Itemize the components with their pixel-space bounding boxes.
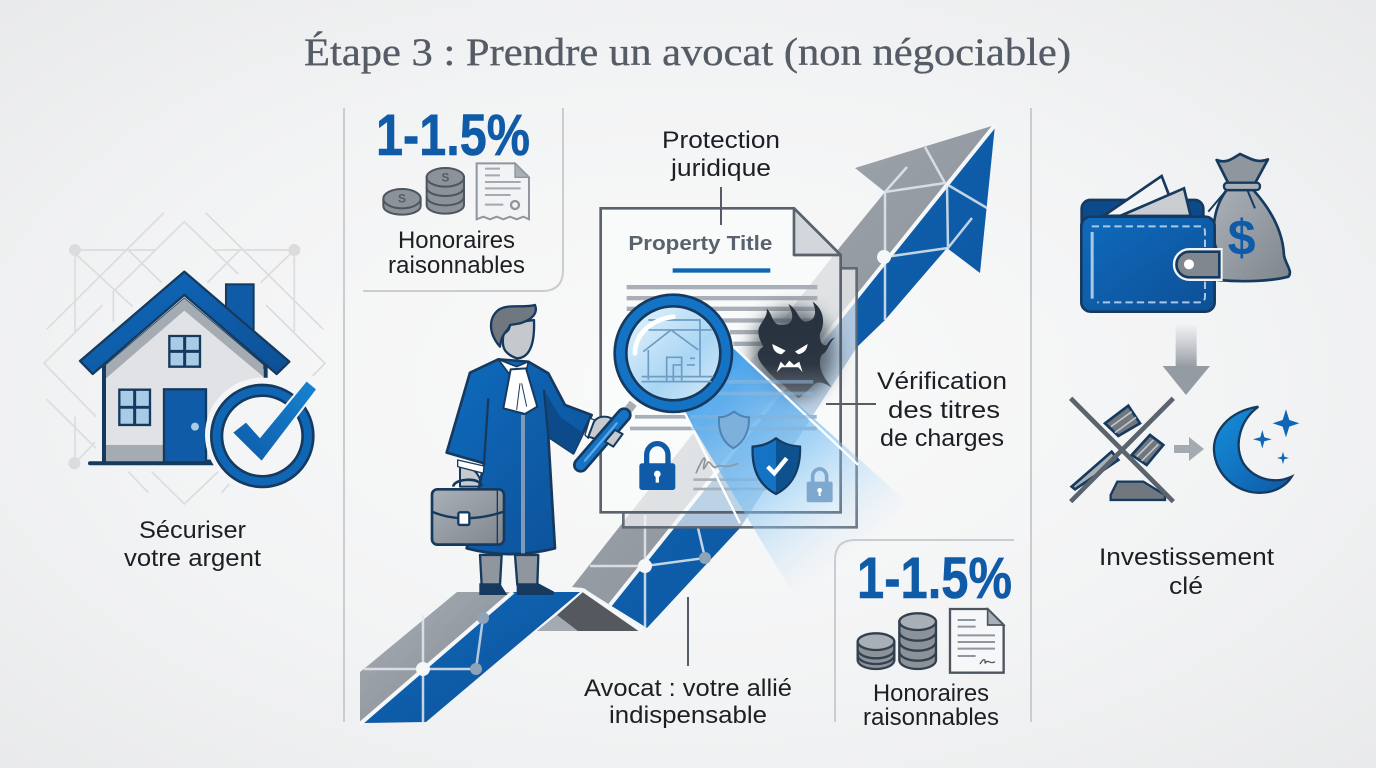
document title: Property Title (628, 232, 772, 255)
document: property title (601, 208, 923, 600)
callout: avocat allié: indispensable (609, 702, 767, 729)
callout: vérification des titres (826, 368, 1007, 452)
callout: vérification des titres: Vérification (877, 368, 1007, 395)
callout: protection juridique: juridique (670, 155, 771, 182)
icon: house with check mark (44, 213, 325, 504)
panel: honoraires haut (376, 103, 530, 279)
callout: protection juridique: Protection (662, 127, 780, 154)
callout: avocat allié (584, 597, 792, 729)
label: sécuriser votre argent: votre argent (124, 545, 261, 572)
icon: faded padlock (807, 469, 833, 502)
icon: moon and stars (1214, 407, 1299, 493)
icon: coins and receipt (383, 163, 529, 219)
label: investissement clé (1099, 544, 1274, 600)
label: investissement clé: Investissement (1099, 544, 1274, 571)
icon: threat demon (752, 302, 835, 398)
icon: magnifying glass lens (613, 293, 733, 413)
icon: small shield (719, 412, 749, 448)
panel: honoraires bas (857, 546, 1012, 731)
label: sécuriser votre argent: Sécuriser (139, 517, 246, 544)
icon: money bag (1208, 154, 1290, 281)
magnifier handle (581, 403, 633, 465)
arrow: ascending path (360, 125, 995, 724)
icon: coins and receipt: S (398, 192, 406, 206)
icon: coin stacks and contract (858, 609, 1004, 673)
label: honoraires raisonnables: Honoraires (398, 227, 515, 254)
signature (696, 458, 738, 473)
light beam (685, 343, 923, 600)
label: honoraires raisonnables (863, 680, 999, 731)
icon: blue padlock (639, 444, 675, 490)
panel: sécuriser votre argent (44, 213, 325, 572)
icon: crossed-out gavel (1071, 398, 1173, 502)
label: honoraires raisonnables: raisonnables (388, 252, 525, 279)
callout: vérification des titres: des titres (888, 397, 1000, 424)
panel: investissement clé (1071, 154, 1299, 600)
title: Étape 3 : Prendre un avocat (non négociable) (304, 30, 1071, 74)
arrow: down (1163, 325, 1210, 395)
callout: vérification des titres: de charges (880, 425, 1004, 452)
arrow: right (1174, 437, 1204, 461)
label: honoraires raisonnables: raisonnables (863, 704, 999, 731)
label: honoraires raisonnables (388, 227, 525, 279)
icon: shield with check (753, 438, 800, 494)
icon: coins and receipt: S (441, 170, 449, 184)
stat: 1-1.5%: 1-1.5% (376, 103, 530, 168)
label: honoraires raisonnables: Honoraires (873, 680, 989, 707)
label: investissement clé: clé (1169, 573, 1203, 600)
stat: 1-1.5%: 1-1.5% (857, 546, 1012, 611)
icon: wallet (1081, 176, 1220, 312)
label: sécuriser votre argent (124, 517, 261, 572)
icon: money bag: $ (1228, 210, 1256, 266)
callout: avocat allié: Avocat : votre allié (584, 675, 792, 702)
figure: lawyer with briefcase (432, 305, 633, 595)
callout: protection juridique (662, 127, 780, 225)
